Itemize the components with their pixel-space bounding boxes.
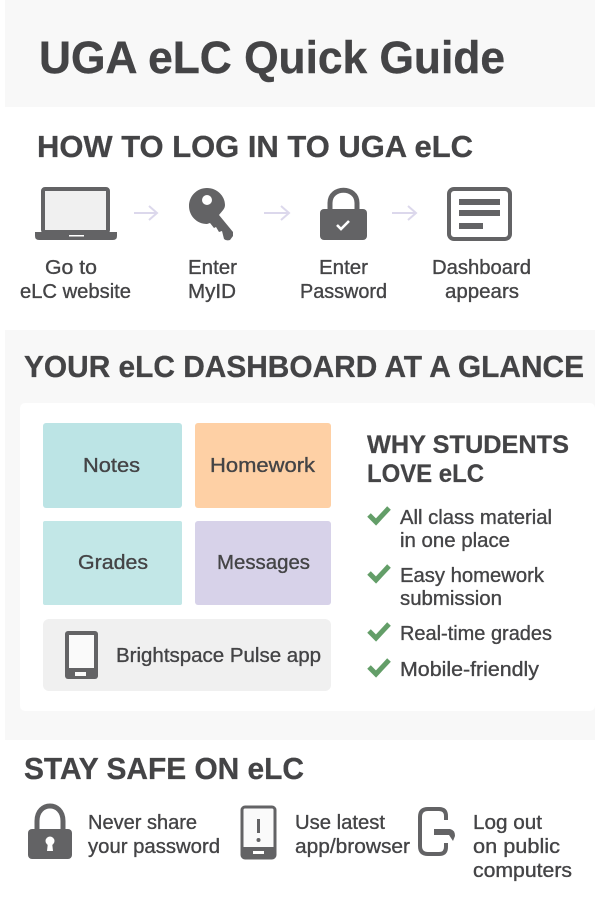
reason: class material: in one place [400,530,510,552]
arrow: step 3 to 4 [392,206,416,220]
heading: stay safe: STAY SAFE ON eLC [24,751,304,786]
icon: check [369,566,389,580]
panel: dashboard at a glance [5,330,595,740]
reason: real-time grades: Real-time grades [400,623,552,645]
safety tip: latest app or browser: Use latest [295,812,385,834]
tile: messages [195,521,331,605]
tile: grades [43,521,182,605]
step label: go to website: Go to [45,257,97,279]
reason: homework submission: submission [400,588,502,610]
reason: homework submission: Easy homework [400,565,545,587]
safety tip: latest app or browser: app/browser [295,836,410,858]
step label: dashboard appears: appears [445,281,519,303]
step label: enter MyID [188,257,237,303]
tile: Brightspace Pulse app [43,619,331,691]
safety tip: never share password: your password [88,836,220,858]
reason: class material: All class material [400,507,552,529]
icon: padlock with check [320,190,367,240]
panel: white card [20,403,595,711]
tile: messages: Messages [217,552,310,574]
panel: title band [5,0,595,107]
icon: key [189,188,233,240]
tile: homework: Homework [210,455,316,477]
step label: dashboard appears [432,257,531,303]
step label: dashboard appears: Dashboard [432,257,531,279]
icon: phone with alert [242,807,275,858]
reason: mobile-friendly: Mobile-friendly [400,659,539,681]
safety tip: never share password: Never share [88,812,197,834]
tile: notes [43,423,182,508]
icon: check [369,660,389,674]
safety tip: log out on public computers: computers [473,860,572,882]
icon: check [369,508,389,522]
icon: padlock [28,806,72,859]
icon: log out door [420,809,455,854]
heading: dashboard at a glance: YOUR eLC DASHBOARD AT A GLANCE [24,349,584,384]
step label: enter MyID: MyID [188,281,236,303]
step label: enter password: Password [300,281,387,303]
list: reasons [369,507,552,681]
heading: why students love eLC: LOVE eLC [367,460,484,488]
icon: check [369,624,389,638]
safety tip: latest app or browser [295,812,410,858]
step label: enter MyID: Enter [188,257,237,279]
reason: homework submission [400,565,545,610]
tile: Brightspace Pulse app: Brightspace Pulse app [116,645,321,667]
title: UGA eLC Quick Guide [39,32,505,83]
tile: notes: Notes [83,455,140,477]
tile: homework [195,423,331,508]
step label: go to website [20,257,131,303]
icon: tablet [65,631,98,679]
step label: enter password [300,257,387,303]
heading: why students love eLC: WHY STUDENTS [367,431,569,459]
icon: laptop [35,189,117,240]
safety tip: log out on public computers: Log out [473,812,542,834]
safety tip: log out on public computers [473,812,572,882]
step label: go to website: eLC website [20,281,131,303]
safety tip: log out on public computers: on public [473,836,560,858]
arrow: step 1 to 2 [134,206,157,220]
tile: grades: Grades [78,552,148,574]
step label: enter password: Enter [319,257,368,279]
icon: dashboard document [449,189,510,239]
reason: class material [400,507,552,552]
heading: how to log in: HOW TO LOG IN TO UGA eLC [37,129,473,164]
panel: how to log in [20,129,531,303]
panel: stay safe [24,751,572,882]
arrow: step 2 to 3 [264,206,289,220]
safety tip: never share password [88,812,220,858]
heading: why students love eLC [367,431,569,488]
